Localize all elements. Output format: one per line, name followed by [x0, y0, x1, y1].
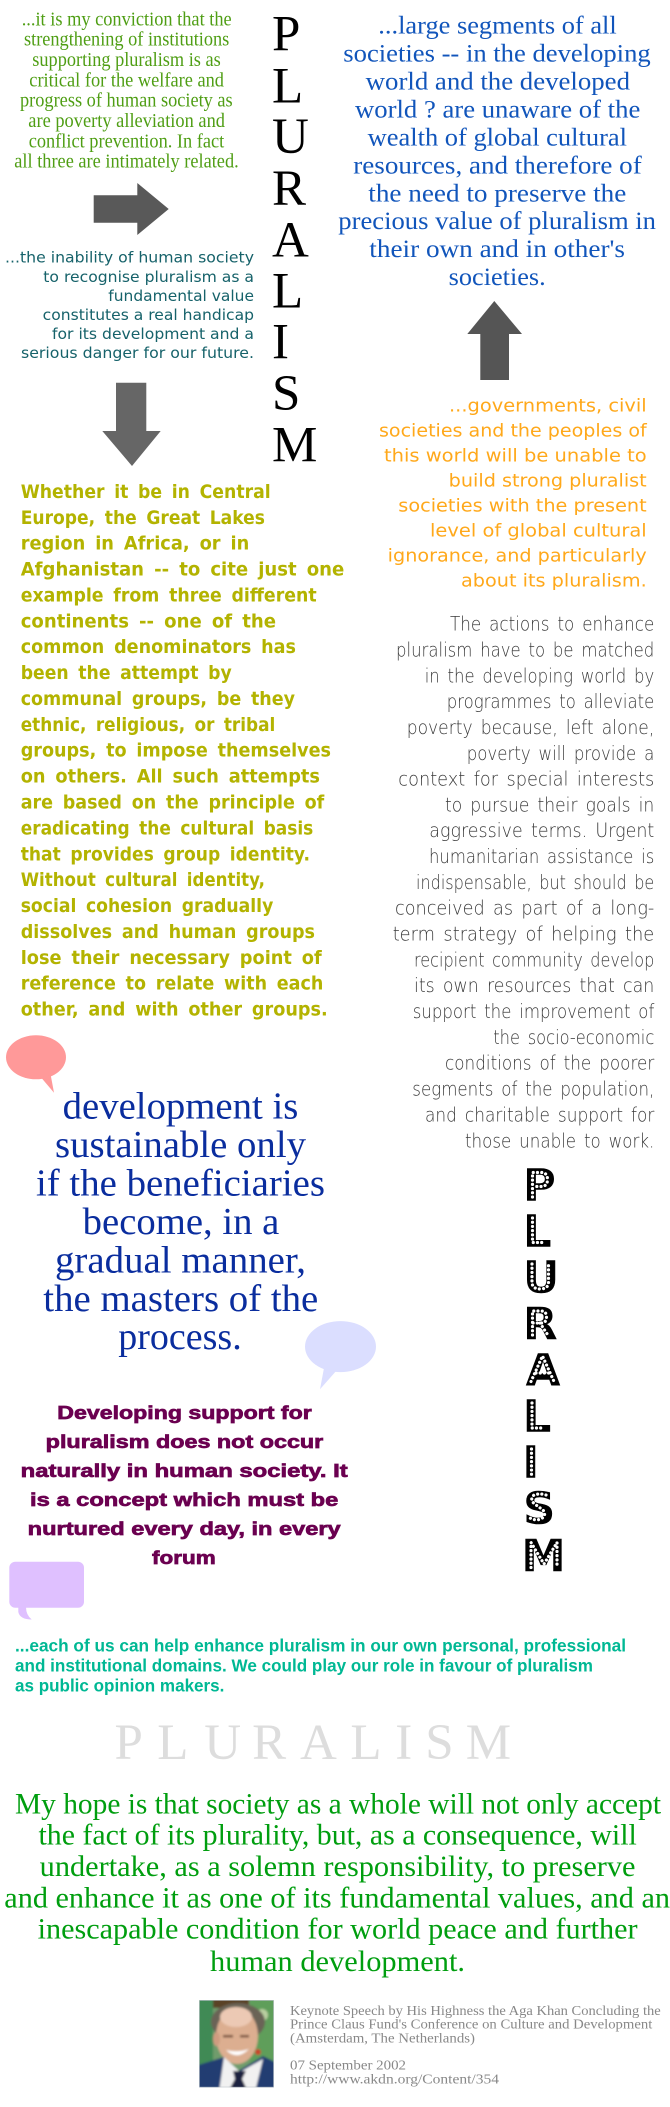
- quote: developing support for pluralism (maroon bold): is a concept which must be: [30, 1489, 338, 1510]
- source credit: (Amsterdam, The Netherlands): [290, 2030, 475, 2045]
- quote: large segments of all societies (blue): wealth of global cultural: [368, 122, 627, 151]
- quote: each of us can help (sea green): as public opinion makers.: [15, 1676, 224, 1696]
- text block: actions to enhance pluralism (grey handwritten): [393, 613, 654, 1152]
- closing quote: my hope (green): inescapable condition for world peace and further: [38, 1914, 638, 1946]
- quote: each of us can help (sea green): and institutional domains. We could play our role in favour of pluralism: [15, 1656, 593, 1676]
- text block: cultural identity paragraph (olive bold): [21, 481, 344, 1020]
- closing quote: my hope (green): and enhance it as one of its fundamental values, and an: [4, 1882, 670, 1914]
- speech bubble: light blue: [305, 1321, 376, 1389]
- closing quote: my hope (green): undertake, as a solemn responsibility, to preserve: [40, 1851, 635, 1883]
- source credit: Prince Claus Fund's Conference on Culture and Development: [290, 2016, 653, 2031]
- quote: large segments of all societies (blue): their own and in other's: [369, 234, 625, 263]
- vertical title: PLURALISM (marquee light-bulb letters): [522, 1161, 565, 1582]
- quote: developing support for pluralism (maroon bold): [21, 1402, 348, 1568]
- quote: large segments of all societies (blue): resources, and therefore of: [353, 150, 642, 179]
- text block: cultural identity paragraph (olive bold): common denominators has: [21, 636, 296, 658]
- vertical title: PLURALISM (black serif): S: [272, 366, 300, 422]
- text block: cultural identity paragraph (olive bold): groups, to impose themselves: [21, 740, 331, 762]
- text block: cultural identity paragraph (olive bold): region in Africa, or in: [21, 533, 249, 555]
- source credit: Keynote Speech by His Highness the Aga Khan Concluding the: [290, 2003, 661, 2018]
- vertical title: PLURALISM (marquee light-bulb letters): U: [523, 1253, 559, 1304]
- quote: governments and civil societies (orange): ...governments, civil: [449, 395, 647, 416]
- quote: strengthening of institutions (green): critical for the welfare and: [29, 70, 224, 91]
- quote: development is sustainable (navy): the masters of the: [43, 1278, 318, 1320]
- quote: large segments of all societies (blue): the need to preserve the: [368, 178, 626, 207]
- quote: developing support for pluralism (maroon bold): nurtured every day, in every: [28, 1518, 342, 1539]
- heading: PLURALISM (light grey, spaced): PLURALISM: [114, 1715, 511, 1771]
- quote: large segments of all societies (blue): world and the developed: [366, 67, 630, 96]
- quote: developing support for pluralism (maroon bold): naturally in human society. It: [21, 1460, 348, 1481]
- quote: governments and civil societies (orange): about its pluralism.: [461, 570, 647, 591]
- quote: large segments of all societies (blue): ...large segments of all: [378, 11, 617, 40]
- closing quote: my hope (green): the fact of its plurality, but, as a consequence, will: [38, 1820, 637, 1852]
- photo: portrait of speaker: [199, 2000, 274, 2088]
- quote: strengthening of institutions (green): conflict prevention. In fact: [29, 131, 225, 152]
- text block: cultural identity paragraph (olive bold): on others. All such attempts: [21, 766, 320, 788]
- text block: cultural identity paragraph (olive bold): example from three different: [21, 584, 317, 606]
- text block: cultural identity paragraph (olive bold): that provides group identity.: [21, 843, 310, 865]
- closing quote: my hope (green): My hope is that society as a whole will not only accept: [15, 1788, 662, 1820]
- quote: strengthening of institutions (green): supporting pluralism is as: [32, 50, 221, 71]
- speech bubble: pink: [6, 1035, 66, 1093]
- arrow: down: [102, 383, 161, 466]
- quote: developing support for pluralism (maroon bold): pluralism does not occur: [46, 1431, 323, 1452]
- quote: governments and civil societies (orange): [379, 395, 647, 591]
- quote: development is sustainable (navy): if the beneficiaries: [36, 1163, 325, 1205]
- text block: cultural identity paragraph (olive bold): Without cultural identity,: [21, 869, 265, 891]
- quote: development is sustainable (navy): gradual manner,: [55, 1240, 306, 1282]
- vertical title: PLURALISM (black serif): P: [272, 7, 300, 63]
- quote: inability of human society (teal): [5, 249, 254, 362]
- vertical title: PLURALISM (marquee light-bulb letters): P: [523, 1161, 556, 1212]
- text block: cultural identity paragraph (olive bold): dissolves and human groups: [21, 921, 315, 943]
- vertical title: PLURALISM (black serif): [272, 7, 317, 473]
- quote: large segments of all societies (blue): [338, 11, 656, 291]
- quote: inability of human society (teal): to recognise pluralism as a: [43, 268, 254, 286]
- arrow: up: [467, 301, 522, 380]
- text block: cultural identity paragraph (olive bold): reference to relate with each: [21, 973, 323, 995]
- vertical title: PLURALISM (black serif): M: [272, 417, 317, 473]
- closing quote: my hope (green): [4, 1788, 670, 1978]
- quote: governments and civil societies (orange): ignorance, and particularly: [388, 545, 647, 566]
- quote: strengthening of institutions (green): progress of human society as: [20, 91, 233, 112]
- vertical title: PLURALISM (marquee light-bulb letters): L: [523, 1207, 551, 1258]
- quote: each of us can help (sea green): ...each of us can help enhance pluralism in our own personal, professional: [15, 1636, 626, 1656]
- closing quote: my hope (green): human development.: [210, 1946, 465, 1978]
- quote: developing support for pluralism (maroon bold): Developing support for: [57, 1402, 312, 1423]
- speech bubble: lilac: [9, 1562, 84, 1620]
- quote: strengthening of institutions (green): [14, 10, 239, 173]
- quote: each of us can help (sea green): [15, 1636, 626, 1696]
- quote: development is sustainable (navy): become, in a: [83, 1201, 279, 1243]
- quote: governments and civil societies (orange): build strong pluralist: [449, 470, 647, 491]
- quote: governments and civil societies (orange): this world will be unable to: [384, 445, 647, 466]
- quote: inability of human society (teal): serious danger for our future.: [21, 344, 254, 362]
- quote: developing support for pluralism (maroon bold): forum: [152, 1547, 216, 1568]
- quote: development is sustainable (navy): development is: [63, 1086, 298, 1128]
- text block: cultural identity paragraph (olive bold): Afghanistan -- to cite just one: [21, 558, 344, 580]
- vertical title: PLURALISM (marquee light-bulb letters): L: [523, 1392, 551, 1443]
- text block: cultural identity paragraph (olive bold): been the attempt by: [21, 662, 232, 684]
- text block: cultural identity paragraph (olive bold): continents -- one of the: [21, 610, 276, 632]
- quote: governments and civil societies (orange): societies and the peoples of: [379, 420, 647, 441]
- text block: cultural identity paragraph (olive bold): are based on the principle of: [21, 792, 325, 814]
- source credit: 07 September 2002: [290, 2057, 406, 2072]
- quote: large segments of all societies (blue): societies.: [449, 262, 546, 291]
- quote: large segments of all societies (blue): precious value of pluralism in: [338, 206, 656, 235]
- text block: cultural identity paragraph (olive bold): eradicating the cultural basis: [21, 817, 313, 839]
- vertical title: PLURALISM (black serif): A: [272, 212, 309, 268]
- quote: strengthening of institutions (green): all three are intimately related.: [14, 152, 239, 173]
- vertical title: PLURALISM (black serif): R: [272, 161, 306, 217]
- quote: strengthening of institutions (green): strengthening of institutions: [24, 30, 229, 51]
- quote: inability of human society (teal): ...the inability of human society: [5, 249, 254, 267]
- vertical title: PLURALISM (black serif): L: [272, 263, 303, 319]
- quote: development is sustainable (navy): sustainable only: [55, 1124, 307, 1166]
- vertical title: PLURALISM (marquee light-bulb letters): A: [526, 1345, 560, 1396]
- vertical title: PLURALISM (marquee light-bulb letters): M: [522, 1531, 565, 1582]
- quote: strengthening of institutions (green): ...it is my conviction that the: [22, 10, 232, 30]
- vertical title: PLURALISM (black serif): U: [272, 109, 309, 165]
- quote: large segments of all societies (blue): societies -- in the developing: [343, 39, 651, 68]
- arrow: right: [94, 183, 169, 235]
- vertical title: PLURALISM (marquee light-bulb letters): S: [523, 1484, 555, 1534]
- quote: large segments of all societies (blue): world ? are unaware of the: [355, 94, 640, 124]
- quote: governments and civil societies (orange): societies with the present: [398, 495, 647, 516]
- text block: cultural identity paragraph (olive bold): social cohesion gradually: [21, 895, 274, 917]
- text block: cultural identity paragraph (olive bold): Europe, the Great Lakes: [21, 507, 265, 529]
- quote: development is sustainable (navy): [36, 1086, 325, 1358]
- vertical title: PLURALISM (black serif): L: [272, 58, 303, 114]
- text block: cultural identity paragraph (olive bold): other, and with other groups.: [21, 998, 328, 1020]
- text block: cultural identity paragraph (olive bold): ethnic, religious, or tribal: [21, 714, 275, 736]
- source credit: [290, 2003, 661, 2086]
- text block: cultural identity paragraph (olive bold): Whether it be in Central: [21, 481, 271, 503]
- vertical title: PLURALISM (marquee light-bulb letters): I: [523, 1438, 539, 1489]
- quote: strengthening of institutions (green): are poverty alleviation and: [28, 111, 225, 132]
- text block: cultural identity paragraph (olive bold): lose their necessary point of: [21, 947, 322, 969]
- vertical title: PLURALISM (black serif): I: [272, 315, 289, 371]
- quote: development is sustainable (navy): process.: [118, 1316, 242, 1358]
- quote: inability of human society (teal): for its development and a: [52, 325, 254, 343]
- text block: cultural identity paragraph (olive bold): communal groups, be they: [21, 688, 296, 710]
- quote: governments and civil societies (orange): level of global cultural: [430, 520, 647, 541]
- vertical title: PLURALISM (marquee light-bulb letters): R: [523, 1299, 557, 1350]
- quote: inability of human society (teal): fundamental value: [108, 287, 254, 305]
- source credit: http://www.akdn.org/Content/354: [290, 2071, 499, 2086]
- quote: inability of human society (teal): constitutes a real handicap: [43, 306, 254, 324]
